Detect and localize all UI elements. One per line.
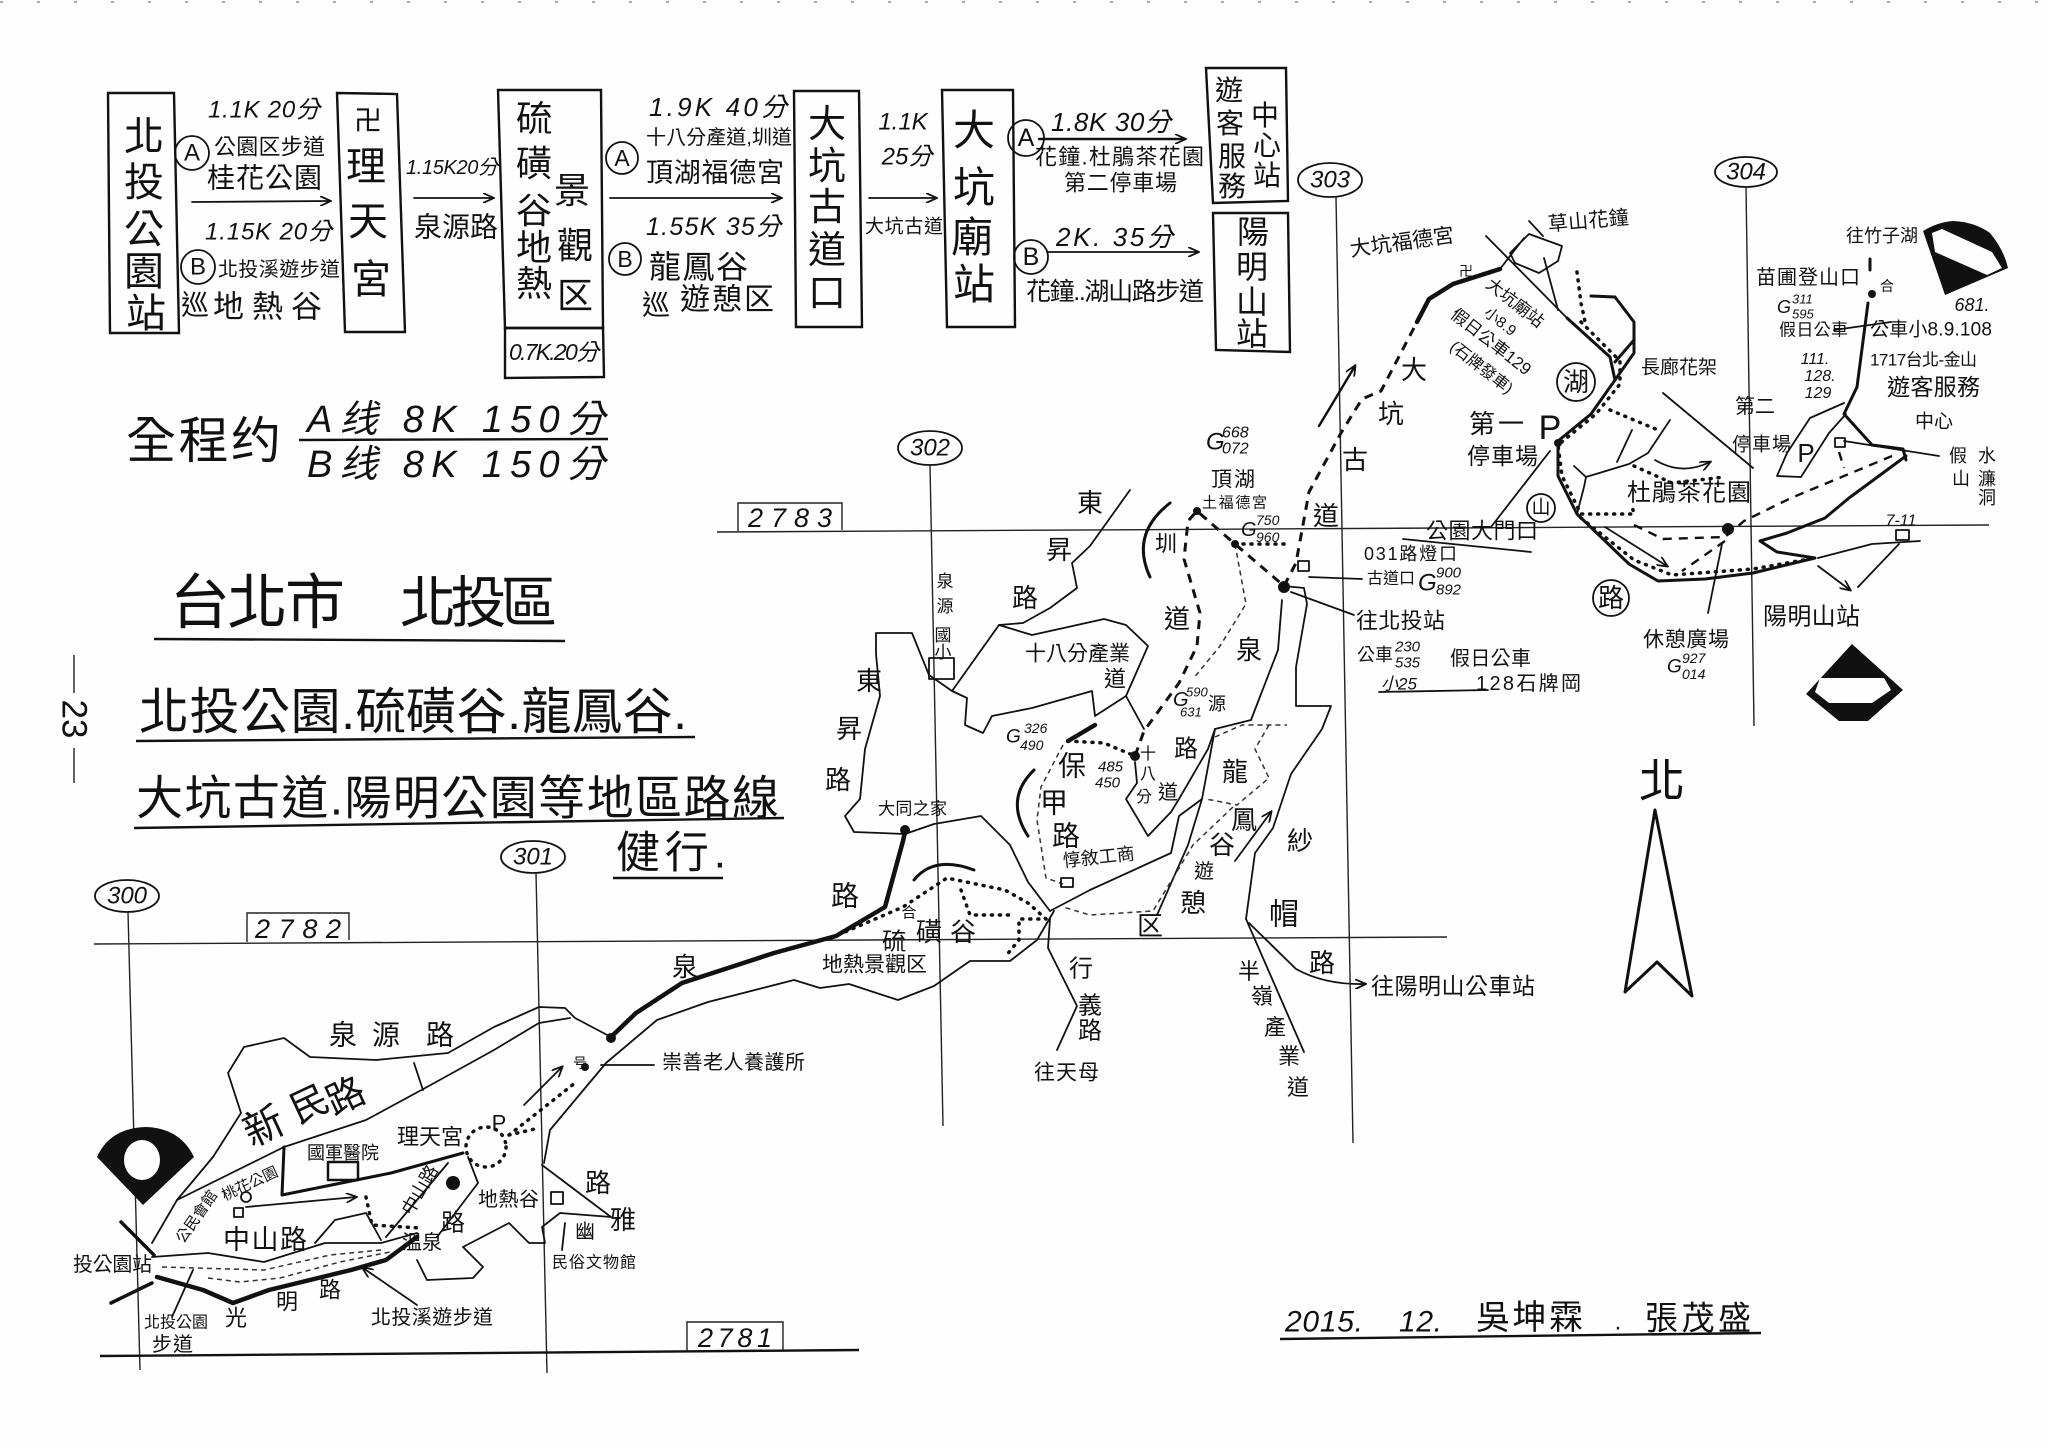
labels: Yangmingshan: 陽明山站 <box>1763 604 1860 630</box>
labels: Yangmingshan: 假日公車 <box>1779 320 1848 340</box>
station box: 硫磺谷地熱景觀区: 硫 <box>516 98 552 138</box>
labels: Yangmingshan: 014 <box>1682 666 1706 682</box>
labels: Yangmingshan: 681. <box>1954 295 1990 315</box>
labels: Beitou park: 北投公園 <box>144 1314 208 1332</box>
station box: 硫磺谷地熱景觀区: 谷 <box>516 190 552 230</box>
labels: Yangmingshan: 假 <box>1949 446 1967 466</box>
segment: 北投公園站 to 理天宮: 北投溪遊步道 <box>218 258 340 281</box>
segment B: 大坑廟站 to 陽明山站: 2K. 35分 <box>1055 222 1176 252</box>
segment: 硫磺谷 to 大坑古道口: 遊憩区 <box>680 284 774 316</box>
labels: central map: 路 <box>1078 1018 1102 1044</box>
labels: Yangmingshan: 大坑廟站 <box>1482 275 1548 331</box>
grid row 2783: 2783 <box>747 503 832 533</box>
labels: Yangmingshan: 927 <box>1682 650 1707 666</box>
circled road name 湖山路: 山 <box>1531 496 1551 518</box>
labels: central map: 750 <box>1256 512 1280 528</box>
grid row 2782 <box>94 913 1447 944</box>
labels: central map: 道 <box>1158 781 1178 804</box>
station box: 硫磺谷地熱景觀区: 觀 <box>557 224 593 266</box>
labels: central map: 龍 <box>1222 757 1248 787</box>
labels: central map: 大同之家 <box>878 800 947 818</box>
grid column 303: 303 <box>1310 166 1351 194</box>
segment: 大坑古道口 to 大坑廟站: 大坑古道 <box>865 216 943 238</box>
author credit and date: 張茂盛 <box>1645 1300 1751 1336</box>
labels: Yangmingshan: 第二 <box>1735 395 1775 418</box>
labels: central map: 631 <box>1180 704 1202 720</box>
total distance summary: 全程约 <box>126 413 281 469</box>
station box: 陽明山站: 山 <box>1236 284 1268 320</box>
station box: 遊客服務中心站: 心 <box>1253 130 1281 160</box>
labels: Beitou park <box>73 952 805 1356</box>
segment: 大坑古道口 to 大坑廟站: 25分 <box>881 144 934 170</box>
segment: 硫磺谷 to 大坑古道口: 龍鳳谷 <box>649 249 748 285</box>
labels: Yangmingshan: 長廊花架 <box>1641 356 1717 378</box>
total distance summary: B线 8K 150分 <box>307 444 609 486</box>
labels: central map: 路 <box>831 880 859 912</box>
labels: Beitou park: 路 <box>426 1020 454 1050</box>
labels: Yangmingshan: 大坑福德宮 <box>1348 224 1456 261</box>
total distance summary <box>126 399 609 486</box>
labels: central map: 分 <box>1136 788 1152 806</box>
segment: 北投公園站 to 理天宮: 地熱谷 <box>213 290 322 324</box>
labels: Yangmingshan: 遊客服務 <box>1887 374 1980 400</box>
labels: Yangmingshan: 濂 <box>1978 469 1996 489</box>
labels: central map: 668 <box>1222 424 1249 442</box>
page number <box>54 655 94 783</box>
labels: central map: 嶺 <box>1251 984 1273 1008</box>
grid column 301: 301 <box>513 844 553 870</box>
station box: 遊客服務中心站: 中 <box>1251 100 1279 130</box>
labels: Beitou park: 民 <box>284 1078 336 1132</box>
station box: 理天宮: 天 <box>348 200 388 244</box>
station box: 北投公園站: 投 <box>124 161 164 205</box>
station box: 硫磺谷地熱景觀区: 景 <box>554 170 590 210</box>
labels: Beitou park: 号 <box>573 1055 587 1071</box>
station box: 理天宮 <box>337 93 405 332</box>
labels: central map: 泉 <box>1236 635 1262 665</box>
station box: 理天宮: 卍 <box>354 104 382 136</box>
labels: Beitou park: P <box>492 1110 506 1136</box>
station box: 遊客服務中心站 <box>1206 68 1288 203</box>
labels: Beitou park: 新 <box>237 1099 291 1155</box>
station box: 大坑古道口: 口 <box>808 273 846 315</box>
labels: central map: 128石牌岡 <box>1476 672 1581 695</box>
title block: 大坑古道.陽明公園等地區路線 <box>136 772 779 824</box>
labels: central map: 路 <box>1309 948 1335 978</box>
labels: central map: 源 <box>936 596 954 616</box>
labels: central map: 道 <box>1287 1074 1309 1100</box>
title block: 北投區 <box>400 572 557 634</box>
labels: central map: 590 <box>1186 684 1208 700</box>
labels: central map: 昇 <box>836 714 862 744</box>
author credit and date: 12. <box>1399 1306 1442 1338</box>
labels: Beitou park: 雅 <box>610 1205 636 1235</box>
labels: Yangmingshan: 129 <box>1805 384 1831 402</box>
grid column 300: 300 <box>107 882 148 910</box>
labels: central map: 路 <box>1174 736 1198 762</box>
labels: Beitou park: 投公園站 <box>73 1253 152 1276</box>
labels: central map: 遊 <box>1194 860 1214 883</box>
labels: Beitou park: 步道 <box>152 1333 193 1356</box>
labels: central map: 072 <box>1222 440 1249 458</box>
labels: central map: 國 <box>934 626 952 644</box>
segment B: 大坑廟站 to 陽明山站 <box>1014 222 1204 306</box>
labels: central map: 合 <box>901 904 917 922</box>
labels: Yangmingshan: 卍 <box>1459 263 1473 279</box>
road network, central map <box>831 322 1417 1052</box>
marker: Yangmingshan station trail end <box>1806 644 1903 721</box>
labels: central map: 十 <box>1140 744 1156 762</box>
labels: Yangmingshan: 洞 <box>1978 488 1996 508</box>
labels: central map: 往陽明山公車站 <box>1371 973 1535 999</box>
labels: Beitou park: 路 <box>320 1070 372 1124</box>
labels: central map: 業 <box>1278 1044 1300 1068</box>
labels: Yangmingshan: 1717台北-金山 <box>1870 350 1977 370</box>
labels: Yangmingshan: 595 <box>1792 306 1814 322</box>
segment A: 大坑廟站 to 遊客服務中心站: 第二停車場 <box>1064 170 1177 196</box>
segment: 理天宮 to 硫磺谷 <box>406 157 500 242</box>
labels: central map: 区 <box>1137 911 1163 941</box>
labels: Yangmingshan: (石牌發車) <box>1446 338 1516 398</box>
labels: Yangmingshan: 311 <box>1792 292 1813 306</box>
labels: central map: 鳳 <box>1231 805 1257 835</box>
labels: Yangmingshan: G <box>1777 297 1791 317</box>
author credit and date: 吳坤霖 <box>1476 1299 1583 1337</box>
segment: 大坑古道口 to 大坑廟站: 1.1K <box>878 108 929 136</box>
map: Beitou park area <box>73 832 1054 1356</box>
grid column 302 <box>898 431 962 1126</box>
map: Liuhuanggu and Longfenggu area <box>822 322 1581 1100</box>
station box: 北投公園站: 北 <box>124 115 164 159</box>
labels: Yangmingshan: 山 <box>1952 469 1970 489</box>
labels: central map: 900 <box>1436 564 1462 582</box>
labels: central map: 義 <box>1078 992 1102 1020</box>
station box: 陽明山站: 明 <box>1236 249 1268 285</box>
labels: central map: 東 <box>856 666 882 696</box>
labels: central map: 450 <box>1095 774 1121 792</box>
station box: 硫磺谷地熱景觀区: 磺 <box>516 142 552 184</box>
labels: Yangmingshan: 公園大門口 <box>1426 518 1538 544</box>
segment B: 大坑廟站 to 陽明山站: B <box>1023 243 1039 271</box>
segment: 硫磺谷 to 大坑古道口: 十八分產道,圳道 <box>646 126 792 149</box>
labels: central map: 行 <box>1069 956 1093 982</box>
grid column 301 <box>501 841 565 1373</box>
labels: Yangmingshan: 道 <box>1313 501 1339 531</box>
labels: Beitou park: 中山路 <box>398 1162 442 1218</box>
station box: 硫磺谷地熱景觀区: 区 <box>557 274 593 316</box>
segment: 硫磺谷 to 大坑古道口: A <box>614 145 630 171</box>
grid column 300 <box>95 880 159 1370</box>
labels: central map: 泉 <box>936 572 954 590</box>
labels: central map: G <box>1173 689 1189 711</box>
station box: 大坑古道口: 大 <box>808 104 846 146</box>
labels: central map: 半 <box>1238 958 1260 984</box>
segment: 北投公園站 to 理天宮: 1.15K 20分 <box>205 218 334 246</box>
labels: Beitou park: 地熱谷 <box>478 1188 539 1211</box>
author credit and date: 2015. <box>1284 1306 1363 1338</box>
grid references <box>94 157 1989 1373</box>
station box: 遊客服務中心站: 遊 <box>1215 74 1243 106</box>
station box: 大坑廟站: 大 <box>953 106 995 154</box>
labels: Yangmingshan: 往竹子湖 <box>1846 226 1918 246</box>
grid column 304: 304 <box>1726 158 1766 186</box>
segment: 硫磺谷 to 大坑古道口: 1.9K 40分 <box>649 92 790 122</box>
segment: 北投公園站 to 理天宮: B <box>190 254 206 280</box>
labels: central map: 路 <box>825 765 851 795</box>
labels: Beitou park: 明 <box>276 1290 298 1314</box>
labels: Beitou park: 泉 <box>672 952 698 982</box>
marker: visitor center trail end <box>1923 221 2008 295</box>
segment A: 大坑廟站 to 遊客服務中心站: A <box>1018 124 1035 152</box>
labels: central map: 憩 <box>1180 888 1206 918</box>
title block: 台北市 <box>170 570 345 636</box>
circled road name 湖山路: 路 <box>1598 583 1624 613</box>
station box: 硫磺谷地熱景觀区: 0.7K.20分 <box>509 339 601 365</box>
labels: central map: G <box>1206 428 1225 456</box>
segment: 理天宮 to 硫磺谷: 泉源路 <box>414 212 498 242</box>
segment: 硫磺谷 to 大坑古道口: 巡 <box>642 290 670 320</box>
segment: 大坑古道口 to 大坑廟站 <box>865 108 943 238</box>
labels: central map: G <box>1241 519 1257 541</box>
station box: 陽明山站 <box>1213 213 1290 352</box>
title block: 健行. <box>616 828 726 878</box>
station box: 陽明山站: 站 <box>1236 316 1268 352</box>
labels: Yangmingshan: 停車場 <box>1732 434 1791 456</box>
segment: 硫磺谷 to 大坑古道口: 1.55K 35分 <box>646 213 784 241</box>
labels: Beitou park: 民俗文物館 <box>552 1254 636 1272</box>
labels: central map: 八 <box>1140 766 1156 782</box>
labels: central map: 帽 <box>1269 898 1299 932</box>
labels: Beitou park: 公民會館 <box>173 1188 221 1246</box>
labels: Yangmingshan: 苗圃登山口 <box>1756 266 1860 289</box>
labels: Yangmingshan <box>1313 206 1996 682</box>
station box: 大坑廟站: 坑 <box>953 164 995 210</box>
labels: Yangmingshan: 假日公車129 <box>1447 305 1535 379</box>
labels: central map: 往北投站 <box>1356 608 1445 634</box>
labels: Yangmingshan: 中心 <box>1915 410 1953 432</box>
labels: central map: 地熱景觀区 <box>822 954 927 976</box>
labels: central map: 490 <box>1020 737 1044 753</box>
station box: 北投公園站: 公 <box>124 208 164 252</box>
road network, Yangmingshan <box>1403 221 1939 613</box>
labels: central map: 道 <box>1104 666 1126 692</box>
station box: 大坑古道口: 古 <box>808 187 846 229</box>
labels: Beitou park: 溫泉 <box>402 1231 442 1254</box>
station box: 硫磺谷地熱景觀区 <box>498 90 604 378</box>
labels: Yangmingshan: 111. <box>1801 350 1829 368</box>
segment: 硫磺谷 to 大坑古道口: 頂湖福德宮 <box>646 158 784 188</box>
labels: Yangmingshan: 草山花鐘 <box>1547 206 1630 236</box>
station box: 理天宮: 理 <box>346 145 386 189</box>
station box: 北投公園站 <box>108 93 179 336</box>
station box: 大坑古道口: 坑 <box>808 146 846 188</box>
labels: Yangmingshan: 128. <box>1804 368 1836 384</box>
labels: Yangmingshan: P <box>1797 438 1815 468</box>
labels: Beitou park: 崇善老人養護所 <box>662 1051 805 1074</box>
labels: central map: 產 <box>1264 1014 1286 1040</box>
labels: central map: 谷 <box>1209 830 1235 860</box>
labels: central map <box>822 424 1581 1100</box>
station box: 大坑廟站: 廟 <box>951 214 993 260</box>
grid column 302: 302 <box>910 434 950 462</box>
north arrow: 北 <box>1639 755 1685 807</box>
labels: central map: 惇敘工商 <box>1062 844 1136 871</box>
labels: Beitou park: 泉 <box>329 1020 357 1050</box>
road network, Beitou park <box>111 832 1054 1317</box>
segment: 硫磺谷 to 大坑古道口: B <box>617 246 633 272</box>
labels: Yangmingshan: G <box>1667 656 1682 678</box>
segment A: 大坑廟站 to 遊客服務中心站: 花鐘.杜鵑茶花園 <box>1035 144 1204 170</box>
labels: central map: 小25 <box>1381 674 1417 694</box>
segment B: 大坑廟站 to 陽明山站: 花鐘..湖山路步道 <box>1026 278 1204 306</box>
labels: Beitou park: 路 <box>441 1210 465 1236</box>
labels: Yangmingshan: 大 <box>1401 355 1427 385</box>
author credit and date: . <box>1615 1308 1621 1336</box>
labels: Beitou park: 源 <box>372 1020 400 1050</box>
labels: central map: 道 <box>1164 604 1190 634</box>
labels: Yangmingshan: 第一 <box>1469 409 1524 439</box>
segment: 北投公園站 to 理天宮: 公園区步道 <box>214 134 325 160</box>
circled road name 湖山路: 湖 <box>1563 367 1589 397</box>
labels: central map: 公車 <box>1357 645 1393 665</box>
station box: 北投公園站: 園 <box>124 250 164 294</box>
segment A: 大坑廟站 to 遊客服務中心站 <box>1008 107 1204 196</box>
labels: Yangmingshan: 031路燈口 <box>1364 544 1457 564</box>
labels: central map: 磺 <box>916 917 942 947</box>
grid column 304 <box>1715 157 1777 726</box>
route strip: stations and segments <box>108 68 1290 378</box>
labels: central map: 頂湖 <box>1211 468 1255 492</box>
marker: Beitou park trail start <box>97 1127 194 1205</box>
labels: central map: 路 <box>1052 820 1080 852</box>
station box: 陽明山站: 陽 <box>1237 214 1269 250</box>
labels: Yangmingshan: 古 <box>1342 445 1368 475</box>
station box: 遊客服務中心站: 務 <box>1218 170 1246 202</box>
labels: Yangmingshan: 坑 <box>1378 399 1404 429</box>
station box: 大坑廟站: 站 <box>953 260 995 308</box>
labels: central map: 東 <box>1077 488 1103 518</box>
station box: 遊客服務中心站: 服 <box>1218 140 1246 172</box>
labels: Beitou park: 路 <box>585 1168 611 1198</box>
labels: central map: 圳 <box>1155 532 1177 556</box>
labels: Beitou park: 光 <box>225 1306 247 1330</box>
labels: central map: 往天母 <box>1034 1062 1099 1084</box>
station box: 大坑古道口: 道 <box>808 230 846 272</box>
labels: central map: 326 <box>1024 720 1048 736</box>
labels: Beitou park: 北投溪遊步道 <box>371 1306 493 1329</box>
labels: central map: G <box>1006 726 1021 748</box>
labels: central map: 892 <box>1436 582 1462 598</box>
title block <box>134 570 784 878</box>
author credit and date <box>1280 1299 1761 1339</box>
labels: central map: 假日公車 <box>1450 647 1531 670</box>
labels: central map: 十八分產業 <box>1025 642 1130 666</box>
station box: 大坑古道口 <box>794 91 862 327</box>
labels: Beitou park: 中山路 <box>223 1225 307 1255</box>
labels: Yangmingshan: 合 <box>1880 278 1894 294</box>
segment: 北投公園站 to 理天宮 <box>175 96 340 324</box>
labels: central map: 535 <box>1395 654 1421 672</box>
segment A: 大坑廟站 to 遊客服務中心站: 1.8K 30分 <box>1051 107 1174 137</box>
labels: central map: 960 <box>1256 529 1280 545</box>
labels: Beitou park: 路 <box>319 1278 341 1302</box>
total distance summary: A线 8K 150分 <box>305 399 609 441</box>
station box: 理天宮: 宮 <box>351 258 391 302</box>
labels: Yangmingshan: 杜鵑茶花園 <box>1627 480 1751 506</box>
labels: central map: 谷 <box>950 917 976 947</box>
grid row 2783 <box>717 503 1989 533</box>
segment: 理天宮 to 硫磺谷: 1.15K20分 <box>406 157 500 179</box>
labels: Yangmingshan: 公車小8.9.108 <box>1870 318 1992 340</box>
labels: central map: 土福德宮 <box>1202 494 1267 512</box>
labels: central map: 紗 <box>1287 826 1313 856</box>
labels: central map: 230 <box>1394 638 1421 656</box>
station box: 硫磺谷地熱景觀区: 熱 <box>516 262 552 304</box>
labels: central map: 小 <box>934 642 952 662</box>
circled road name 湖山路 <box>1527 363 1629 616</box>
station box: 北投公園站: 站 <box>126 292 166 336</box>
title block: 北投公園.硫磺谷.龍鳳谷. <box>139 684 687 740</box>
grid row 2781: 2781 <box>697 1323 772 1353</box>
labels: Beitou park: 桃花公園 <box>219 1164 281 1204</box>
labels: central map: 硫 <box>882 928 906 956</box>
segment: 北投公園站 to 理天宮: 桂花公園 <box>207 162 322 194</box>
labels: central map: 甲 <box>1040 788 1068 818</box>
station box: 遊客服務中心站: 客 <box>1216 108 1244 138</box>
labels: Yangmingshan: P <box>1539 409 1561 447</box>
segment: 北投公園站 to 理天宮: 巡 <box>181 290 209 320</box>
labels: Beitou park: 理天宮 <box>397 1124 463 1150</box>
labels: central map: 保 <box>1058 750 1086 782</box>
labels: central map: G <box>1418 570 1437 596</box>
labels: Beitou park: 國軍醫院 <box>307 1143 379 1163</box>
labels: Yangmingshan: 7-11 <box>1886 512 1916 530</box>
segment: 北投公園站 to 理天宮: A <box>184 140 200 166</box>
station box: 遊客服務中心站: 站 <box>1253 160 1281 190</box>
segment: 北投公園站 to 理天宮: 1.1K 20分 <box>208 96 322 124</box>
labels: central map: 485 <box>1098 758 1124 776</box>
station box: 大坑廟站 <box>942 90 1015 327</box>
segment: 硫磺谷 to 大坑古道口 <box>606 92 792 320</box>
labels: Yangmingshan: 停車場 <box>1467 443 1538 469</box>
grid row 2782: 2782 <box>254 914 341 944</box>
page number: 23 <box>54 700 94 738</box>
map: Yangmingshan park area <box>1313 206 2008 721</box>
labels: Yangmingshan: 小8.9 <box>1481 304 1519 340</box>
labels: Beitou park: 幽 <box>575 1220 595 1243</box>
labels: central map: 昇 <box>1046 535 1072 565</box>
labels: central map: 路 <box>1012 583 1038 613</box>
labels: Yangmingshan: 休憩廣場 <box>1643 628 1729 652</box>
north arrow <box>1625 755 1692 996</box>
labels: central map: 源 <box>1208 694 1226 714</box>
grid column 303 <box>1298 163 1362 1143</box>
grid row 2781 <box>100 1322 859 1356</box>
labels: Yangmingshan: 水 <box>1978 446 1996 466</box>
labels: central map: 古道口 <box>1367 570 1415 588</box>
station box: 硫磺谷地熱景觀区: 地 <box>516 226 552 268</box>
